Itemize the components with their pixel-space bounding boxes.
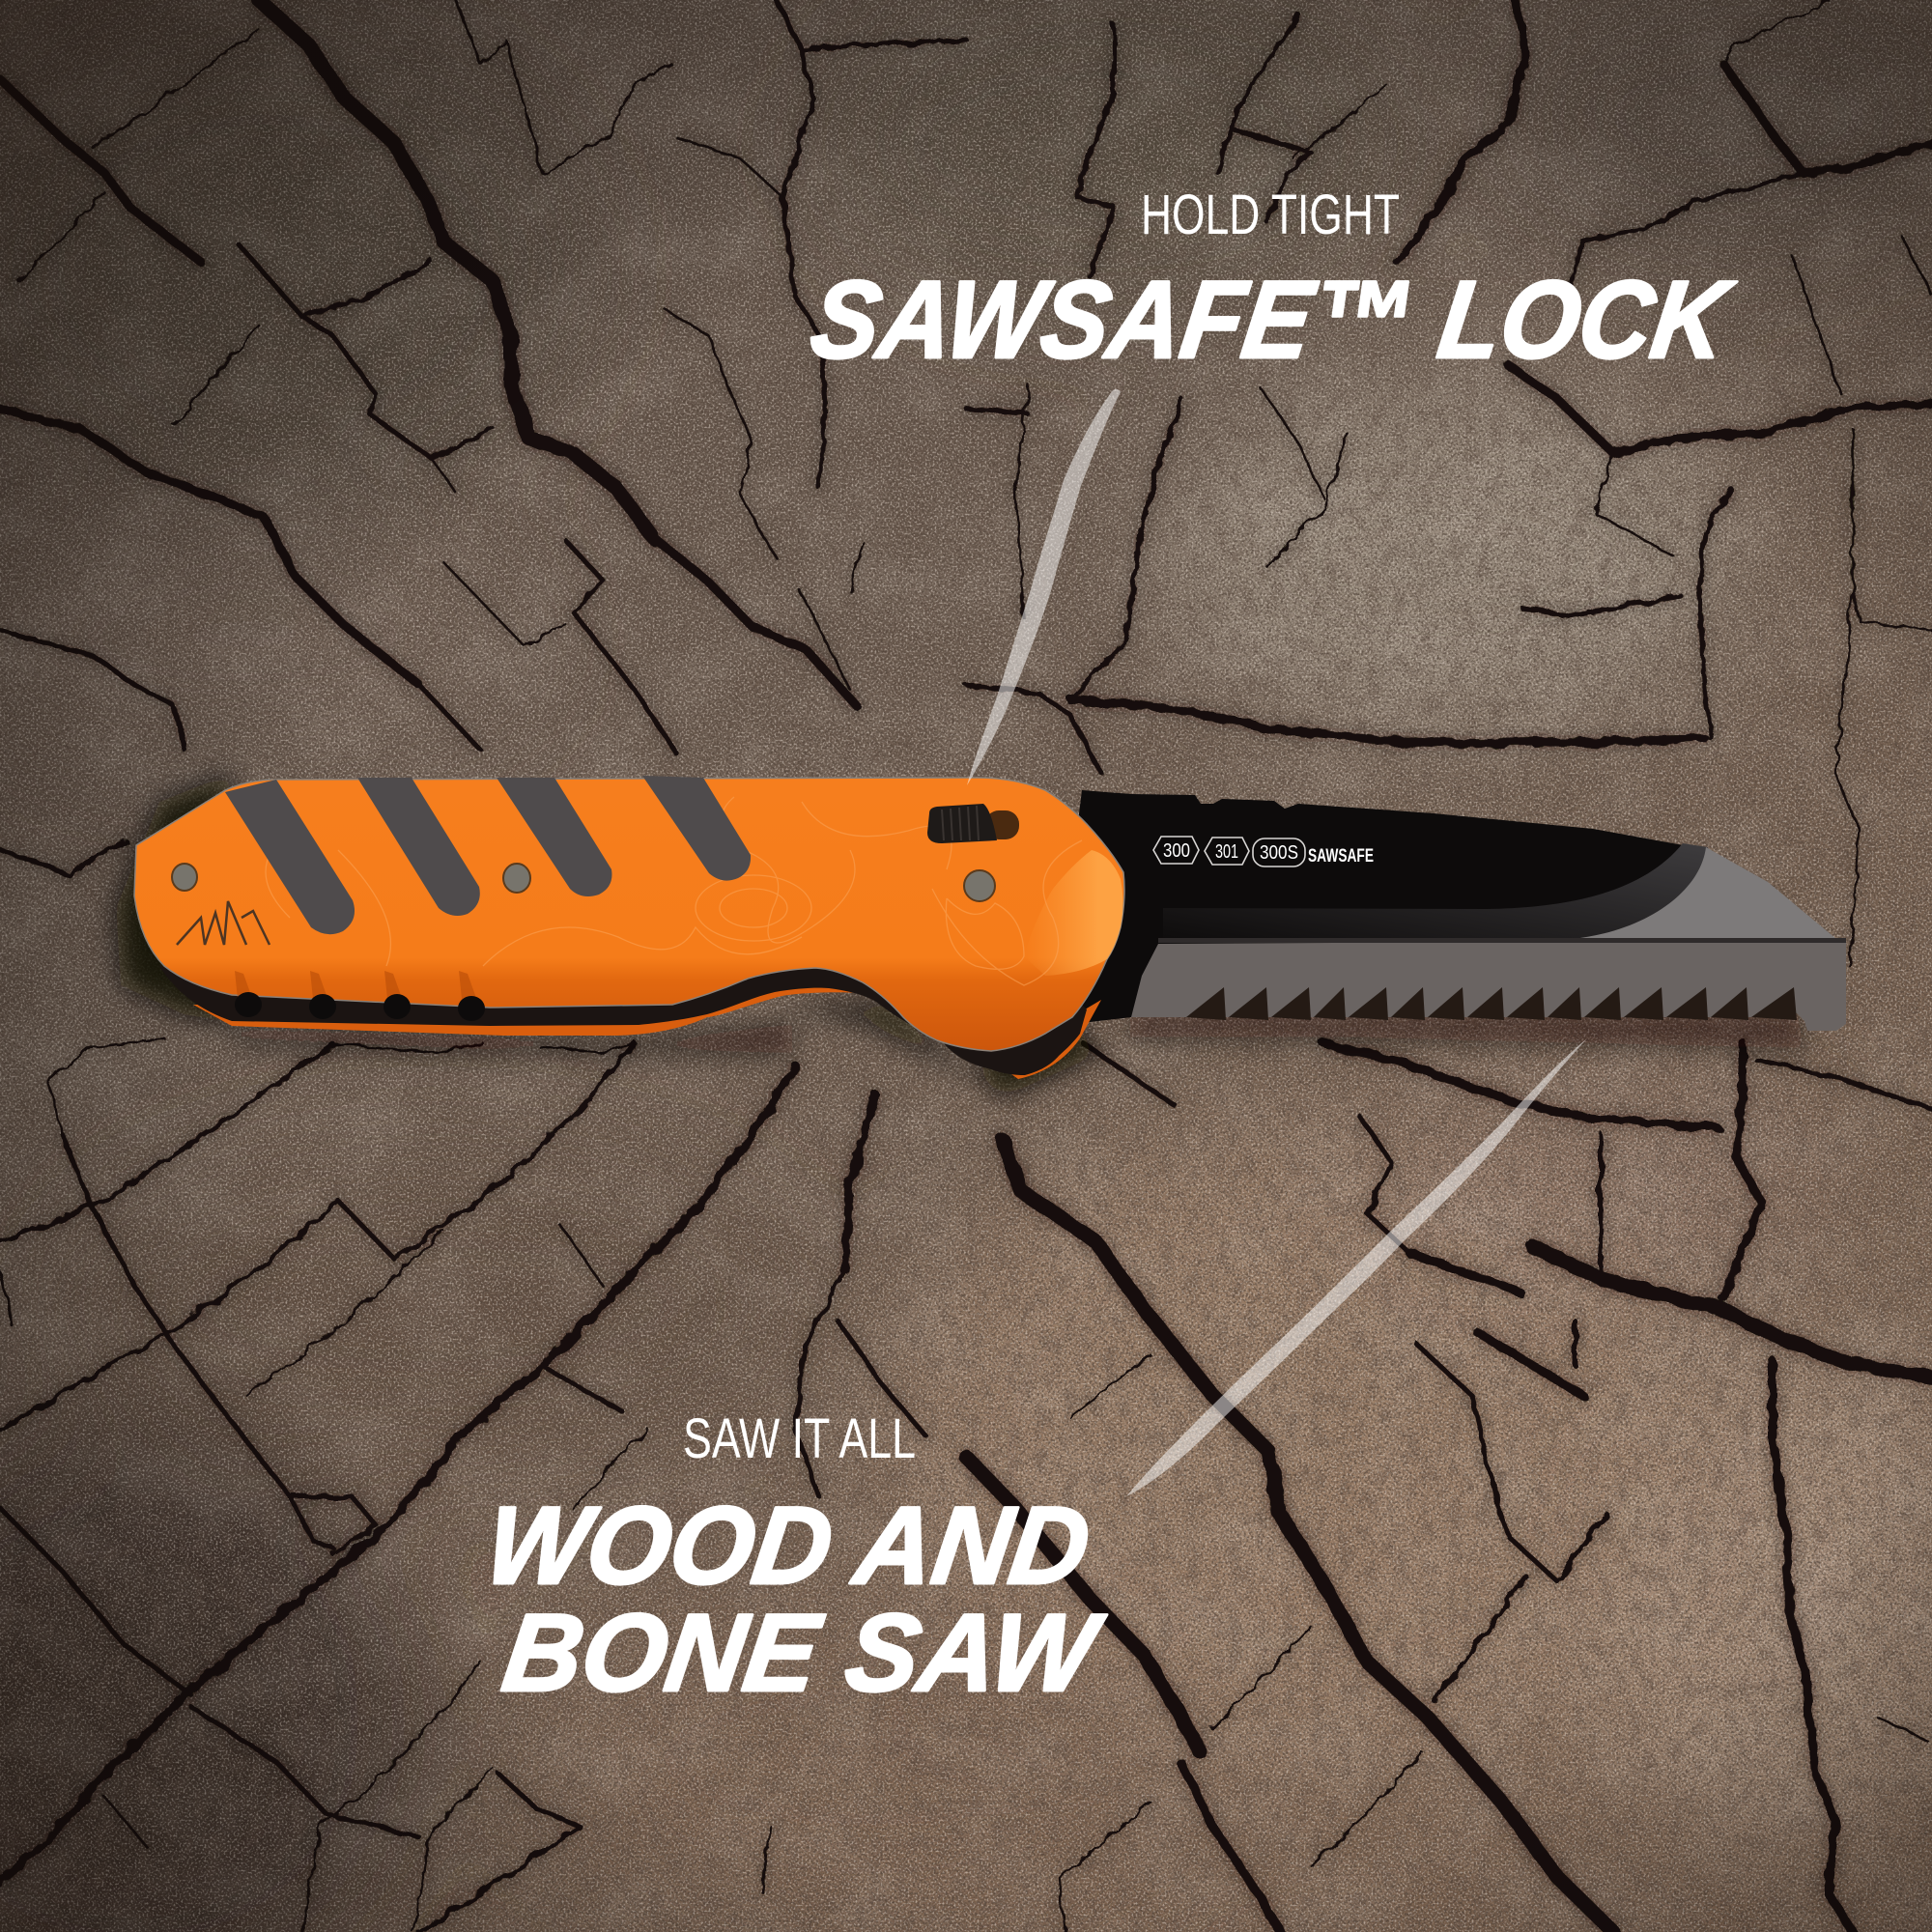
grind bevel [1163,843,1708,940]
gray blade tip [1572,847,1836,939]
lower handle scale [193,978,1101,1079]
topographic texture [266,797,1082,985]
badge 300S: 300S [1260,842,1298,864]
SAWSAFE marking: SAWSAFE [1308,846,1374,867]
knife shadow [116,773,1806,1096]
heading: wood and bone saw: BONE SAW [497,1592,1111,1715]
saw teeth [1186,987,1797,1020]
saw bar [1131,940,1846,1031]
handle finger ridges [235,971,485,1021]
gray grip strips [225,776,751,934]
mountain logo [177,901,270,945]
subheading: hold tight: HOLD TIGHT [1141,184,1400,246]
slider slot [985,810,1019,839]
badge 301: 301 [1215,841,1238,863]
callout: hold tight [805,184,1741,382]
callout: saw it all [479,1407,1111,1715]
black liner [159,956,1087,1075]
badge 300: 300 [1163,840,1190,862]
knife [134,776,1846,1079]
heading: wood and bone saw [479,1485,1111,1715]
subheading: saw it all: SAW IT ALL [683,1407,916,1470]
blade markings [1153,837,1374,867]
badge 300 [1153,837,1199,864]
orange handle scale [134,778,1124,1051]
heading: wood and bone saw: WOOD AND [479,1485,1096,1607]
leader line: lock [967,389,1121,785]
badge 301 [1205,838,1249,865]
heading: SawSafe lock: SAWSAFE™ LOCK [805,259,1741,382]
leader line: saw [1126,1038,1587,1496]
badge 300S [1253,838,1305,867]
handle edge highlight [1024,850,1122,976]
SawSafe lock slider [927,804,997,843]
screws [172,864,995,901]
blade black body and tang [1053,790,1739,1024]
blade [1053,790,1846,1031]
